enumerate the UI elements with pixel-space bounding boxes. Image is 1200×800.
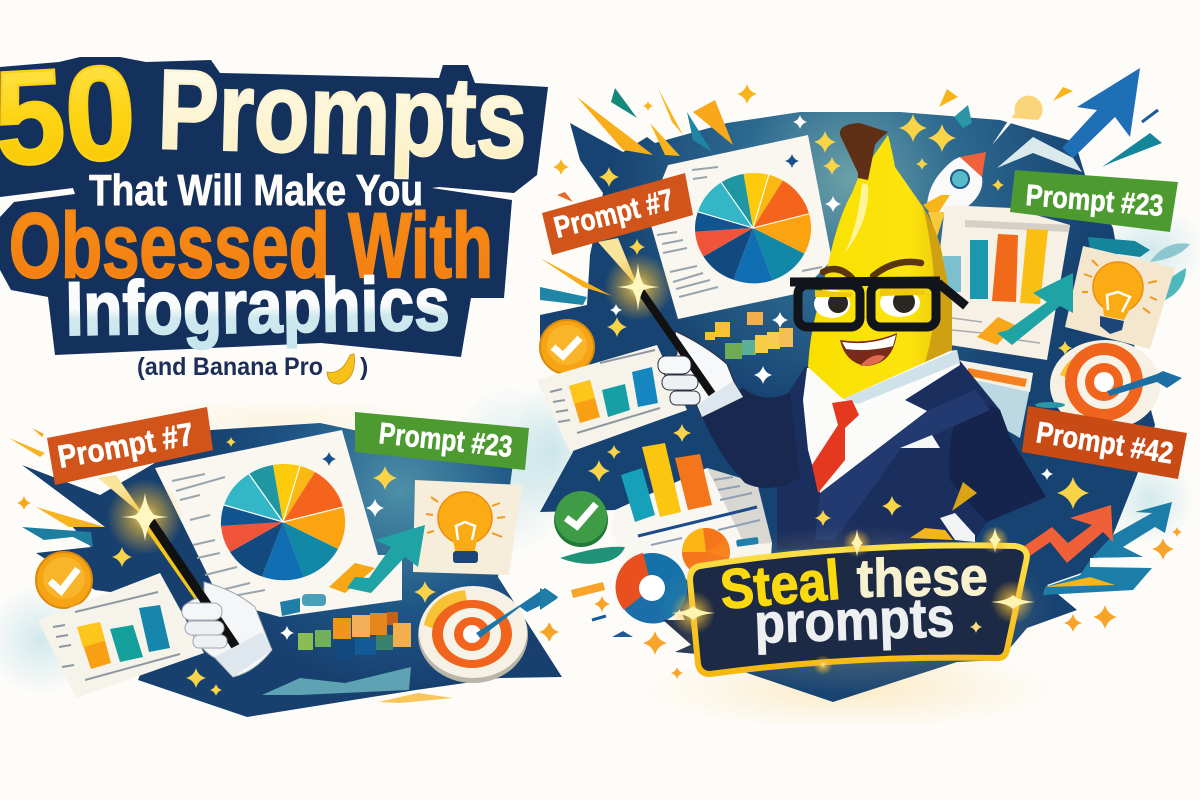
title line: 50 Prompts xyxy=(0,38,529,194)
icon: banana emoji xyxy=(327,354,354,384)
background hazes xyxy=(0,205,1200,730)
panel: left scene xyxy=(9,407,562,717)
mouth xyxy=(840,333,897,366)
mini heat bars xyxy=(298,612,411,660)
right shade xyxy=(923,207,952,362)
arrow: teal ribbons xyxy=(1043,502,1172,595)
tag: Prompt #7: Prompt #7 xyxy=(55,416,196,475)
badge text: Steal these: Steal xyxy=(718,548,843,621)
eyes xyxy=(814,287,925,318)
icon: target xyxy=(418,586,558,683)
icon: green check xyxy=(554,491,608,547)
lower document with bars xyxy=(610,443,772,585)
icon: light bulb card xyxy=(1065,246,1175,349)
tag: Prompt #42: Prompt #42 xyxy=(1034,416,1175,471)
arrow: red growth xyxy=(1023,505,1113,563)
small pie chart xyxy=(682,528,730,576)
title line: 50 Prompts: Prompts xyxy=(156,46,529,182)
glasses xyxy=(790,281,966,327)
tag: Prompt #23 xyxy=(1010,170,1178,232)
icon: rocket xyxy=(923,152,986,237)
title line: Obsessed With: Obsessed With xyxy=(9,195,493,297)
arrow: growth xyxy=(329,525,425,593)
tag: Prompt #23: Prompt #23 xyxy=(1024,179,1165,223)
mini heat bars xyxy=(705,312,793,359)
subtitle: (and Banana Pro xyxy=(137,353,323,381)
subtitle: ) xyxy=(360,353,368,381)
eyebrows xyxy=(823,262,921,278)
magic wand and glove xyxy=(598,238,743,417)
sparkles xyxy=(17,437,559,696)
arrow: growth xyxy=(977,273,1073,345)
bar chart card xyxy=(537,345,687,452)
magic wand and glove xyxy=(98,475,272,677)
highlight xyxy=(844,183,868,252)
title line: Infographics: Infographics xyxy=(65,262,450,352)
navy splash xyxy=(22,423,562,717)
top right arrow group xyxy=(939,68,1190,307)
icon: target xyxy=(1035,340,1182,430)
badge text: Steal these xyxy=(718,547,988,621)
left shards xyxy=(9,428,105,547)
document with pie chart xyxy=(155,430,402,617)
bottom ribbon xyxy=(262,667,411,695)
navy splash xyxy=(540,112,1155,702)
suit xyxy=(700,357,1046,550)
icon: check badge xyxy=(540,320,594,374)
bar chart card behind banana xyxy=(940,205,1070,360)
tie xyxy=(812,400,859,493)
panel: right scene xyxy=(537,68,1190,702)
title line: That Will Make You: That Will Make You xyxy=(89,166,423,215)
banana body xyxy=(808,135,952,399)
pie chart xyxy=(221,464,345,580)
shirt xyxy=(803,350,960,493)
call-to-action badge xyxy=(655,525,1055,695)
badge sparkles xyxy=(671,526,1035,675)
tag: Prompt #7: Prompt #7 xyxy=(551,183,677,245)
document with pie chart xyxy=(648,135,832,319)
title banner xyxy=(0,38,548,357)
bar chart card xyxy=(38,573,204,698)
report card xyxy=(958,360,1033,438)
stem xyxy=(840,123,888,180)
scattered shapes lower left xyxy=(540,547,697,679)
donut chart xyxy=(616,553,687,624)
tag: Prompt #23: Prompt #23 xyxy=(377,417,514,464)
top-left shards xyxy=(540,88,733,305)
pie chart xyxy=(695,173,811,283)
sparkles xyxy=(553,84,1182,632)
banana mascot xyxy=(700,123,1046,550)
tag: Prompt #42 xyxy=(1022,406,1187,479)
icon: light bulb card xyxy=(413,480,522,575)
icon: check badge xyxy=(36,552,92,608)
badge text: Steal these: these xyxy=(856,547,988,609)
badge text: prompts: prompts xyxy=(753,585,955,655)
